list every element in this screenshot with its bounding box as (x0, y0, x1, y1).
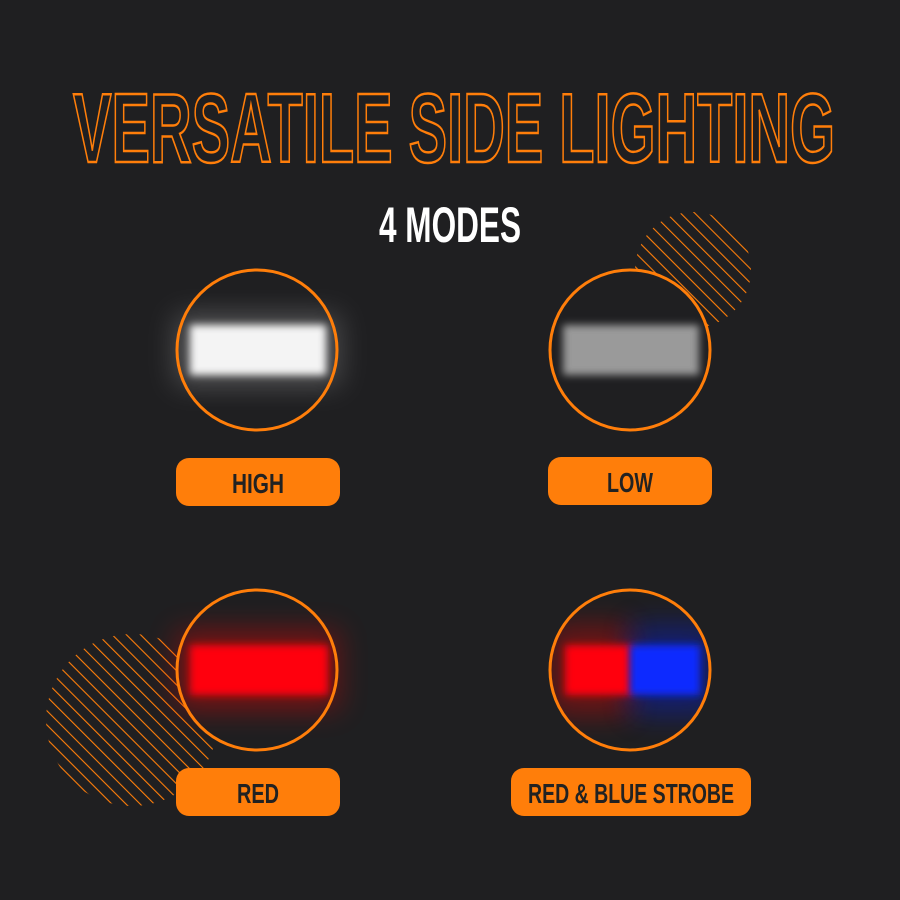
mode: low: LOW (607, 467, 653, 498)
mode: high (175, 270, 340, 506)
mode: red: RED (237, 778, 279, 809)
subtitle: 4 MODES (379, 197, 521, 253)
hatch circle: bottom left (46, 634, 218, 806)
mode: red & blue strobe (511, 590, 751, 816)
mode: red & blue strobe: RED & BLUE STROBE (528, 778, 734, 809)
mode: low (548, 270, 712, 505)
mode: red (175, 590, 340, 816)
mode: high: HIGH (232, 468, 284, 499)
hatch circle: top right (635, 212, 751, 328)
